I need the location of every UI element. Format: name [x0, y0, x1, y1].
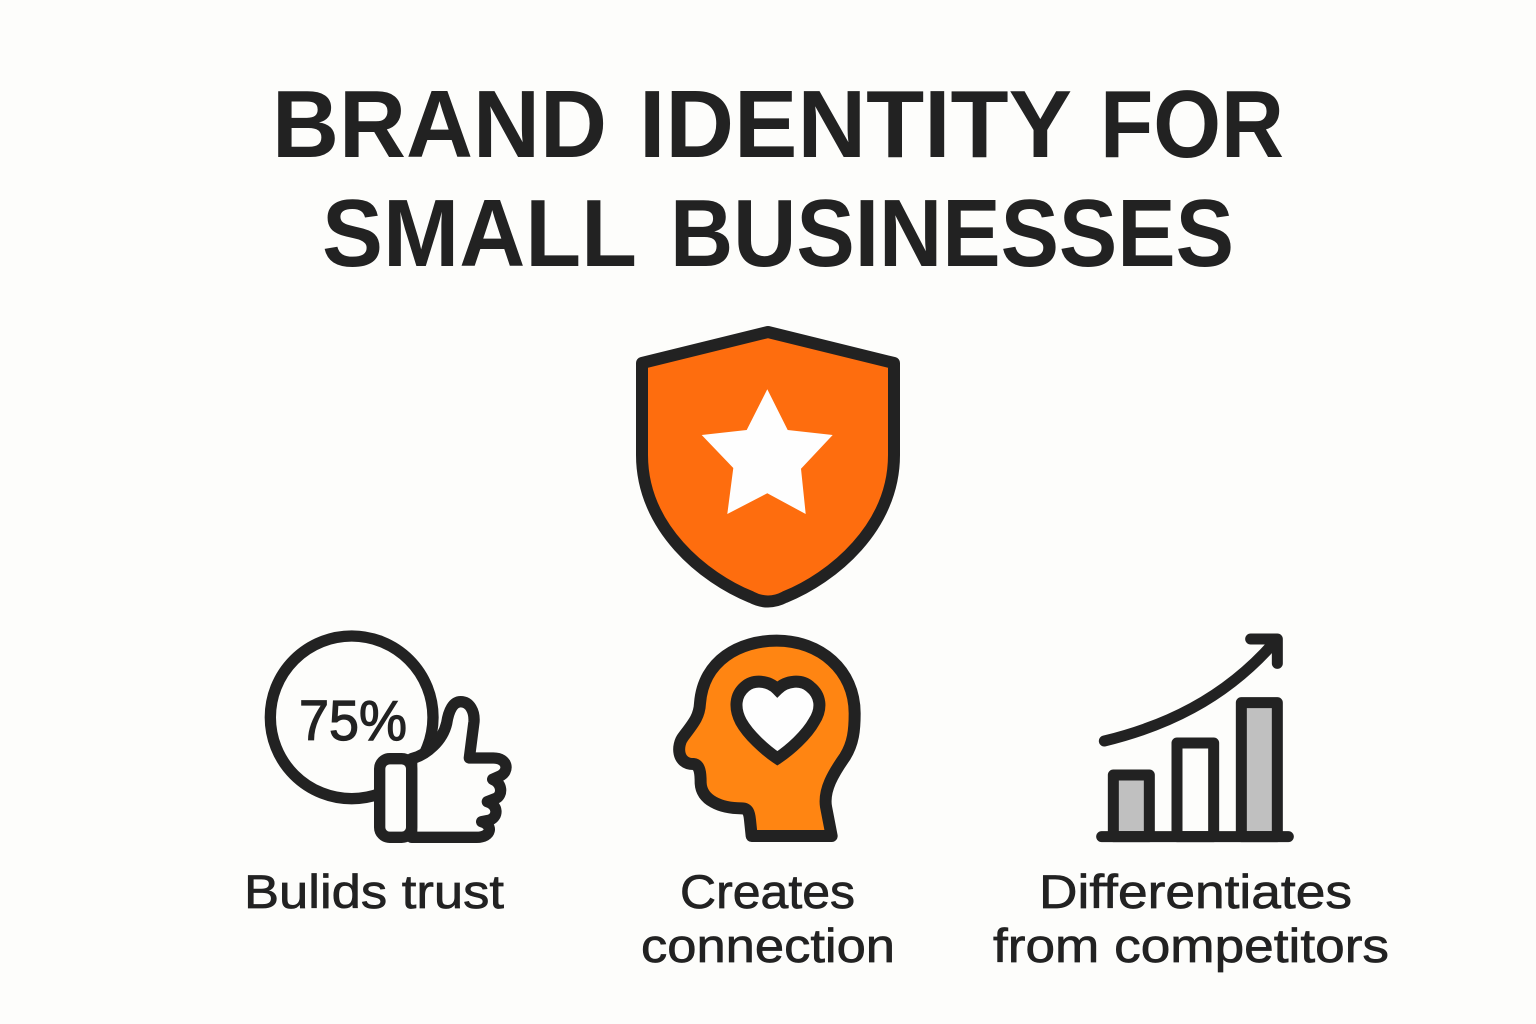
title: FOR: [1100, 71, 1284, 178]
title: BUSINESSES: [670, 180, 1234, 287]
label: creates connection: [641, 865, 895, 972]
icon: head with heart: [679, 641, 855, 836]
icon: 75% circle with thumbs up: [270, 636, 506, 837]
title: SMALL: [322, 180, 637, 287]
icon: 75% circle with thumbs up: 75%: [299, 689, 407, 753]
icon: shield with star: [642, 332, 894, 602]
label: differentiates from competitors: [993, 865, 1389, 972]
label: builds trust: Bulids trust: [244, 865, 504, 918]
title: [272, 71, 1284, 287]
label: creates connection: connection: [641, 919, 895, 972]
label: differentiates from competitors: from competitors: [993, 919, 1389, 972]
title: BRAND: [272, 71, 607, 178]
label: creates connection: Creates: [680, 865, 855, 918]
title: IDENTITY: [639, 71, 1072, 178]
icon: rising bar chart with arrow: [1102, 639, 1288, 837]
label: differentiates from competitors: Differentiates: [1039, 865, 1352, 918]
